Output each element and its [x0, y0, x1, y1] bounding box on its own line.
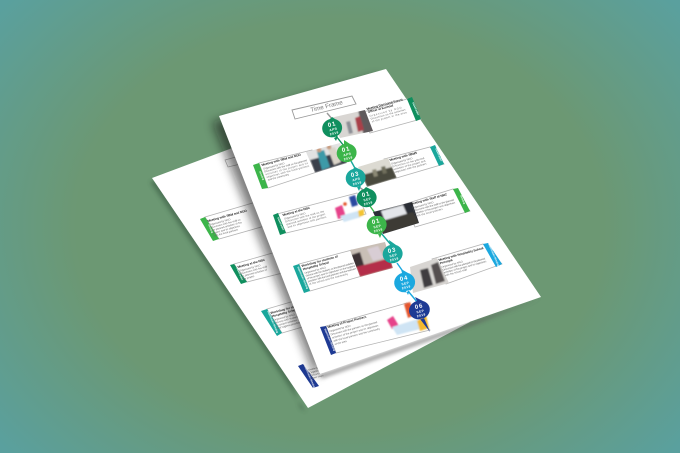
row 1 text: Officer at Kurnool [367, 103, 394, 114]
row 6 text: Session with the students on the planned activities [305, 261, 355, 278]
row 5 photo [373, 202, 419, 234]
row 6 text: Organized by NGO [304, 265, 326, 275]
row 3 date badge: 2019 [352, 180, 362, 186]
row 3 text [389, 149, 428, 174]
row 8 text: Discussion with the partners on the planned [330, 320, 378, 336]
row 1 box [360, 99, 421, 133]
back row: green [200, 202, 262, 241]
row 8: left, navy: Stakeholder Meeting [323, 328, 336, 352]
row 3: right, teal [346, 145, 444, 192]
row 6 tab [293, 264, 310, 293]
back row: teal: Session with students [274, 314, 300, 325]
row 3 date badge: APR [352, 176, 361, 182]
back row: green: project and its objectives [212, 224, 241, 235]
back row: dark green: on planned activities of [241, 268, 268, 278]
row 1 photo [330, 110, 373, 138]
row 6: left, teal: Stakeholder Meeting [296, 266, 309, 290]
row 6 date badge: SEP [389, 252, 398, 258]
row 4: left, dark green: Stakeholder [276, 217, 285, 231]
row 7 date badge: 2019 [401, 284, 411, 290]
row 7 tab [483, 243, 502, 267]
row 8 date badge: 06 [414, 303, 424, 311]
row 7 date badge [394, 269, 415, 295]
row 8 text: activities of the project and its objectives [331, 323, 380, 340]
row 8 text [327, 313, 382, 346]
back row: green: Meeting with SBM and NGO [207, 209, 248, 223]
row 3 text: Organized by NGO [390, 156, 413, 166]
row 4 text: and its objectives with partners [287, 215, 328, 229]
back row: teal: Organized by NGO [273, 312, 295, 322]
row 4 text [282, 203, 328, 229]
row 4 text: planned activities of the project [286, 212, 326, 226]
row 5 tab [453, 188, 470, 213]
row 5 date badge: SEP [373, 223, 382, 229]
row 7 box [432, 244, 502, 284]
row 2 date badge: APR [343, 151, 352, 157]
back row: teal: Workshop for students of [270, 301, 308, 315]
row 3 photo [358, 158, 397, 187]
row 3 text: objectives with the partners [394, 161, 428, 174]
back row: teal: on project activities [275, 318, 298, 327]
row 2 tab [253, 163, 268, 189]
row 7 text: with the school staff [444, 268, 468, 277]
row 6 text: Workshop for students of [301, 254, 339, 268]
row 4 text: Meeting at the NRC [282, 206, 311, 217]
row 8 text: of the area [334, 339, 348, 346]
row 1 tab [407, 97, 421, 121]
row 5: right, green [367, 188, 470, 240]
row 2 box [259, 150, 320, 188]
row 1 date badge [322, 117, 342, 141]
back row: teal [261, 302, 302, 336]
row 5 date badge: 2019 [373, 227, 383, 233]
row 4 date badge: 01 [361, 191, 371, 199]
row 3 tab [430, 145, 444, 166]
front page sheet [219, 69, 541, 374]
row 7 text: Principal [439, 258, 453, 265]
row 8 text: Meeting of Project Partners [327, 315, 367, 329]
row 6 text: Hospitality School [302, 260, 330, 271]
row 4 tab [273, 213, 286, 235]
row 5 text [410, 191, 458, 218]
row 3 text: Meeting with SBMS [389, 151, 418, 162]
back page content [200, 157, 324, 388]
front page shadow [212, 76, 400, 378]
row 4 date badge: 2019 [363, 200, 373, 206]
row 8 date badge: SEP [416, 308, 425, 314]
row 2 date badge [337, 140, 357, 162]
back row: teal: Hospitality School [271, 307, 299, 318]
row 1: right, dark green: Stakeholder [411, 102, 420, 116]
row 8 date badge [409, 297, 430, 332]
back row: dark green: Meeting at the NRC [237, 258, 266, 269]
row 5 text: Organized by NGO [411, 200, 434, 210]
row 8 text: with the local partners and the community [333, 326, 381, 343]
row 4 date badge: SEP [363, 196, 372, 202]
row 5 text: activities of the project and objectives [414, 200, 456, 215]
back title box [224, 157, 238, 168]
row 4: left, dark green [273, 187, 377, 235]
row 5 text: Discussion with the staff on the planned [413, 198, 455, 212]
row 8 text: Organized by NGO [329, 324, 351, 333]
back row: dark green: the project [242, 274, 255, 281]
row 7 text: Meeting with Hospitality School [438, 246, 484, 262]
back row: teal: and hygiene practices [276, 320, 303, 330]
back page shadow [150, 154, 306, 412]
back row: dark green: Discussion with the staff [240, 264, 268, 275]
back page sheet [152, 147, 470, 408]
row 4 box [277, 193, 366, 233]
back row: green: Meeting [207, 224, 214, 234]
row 8: left, navy [320, 297, 430, 355]
row 5 box [405, 189, 470, 227]
back page [150, 147, 470, 412]
row 7 text [438, 246, 491, 277]
row 8 illustration [387, 302, 429, 335]
row 7 photo [410, 258, 449, 293]
back row: navy: Organized by NGO [309, 365, 331, 375]
row 4 text: Discussion with the staff on the [285, 209, 325, 223]
row 6 date badge: 2019 [389, 256, 399, 262]
row 6 date badge: 03 [387, 247, 397, 255]
back row: dark green: Organized by NGO [238, 263, 261, 273]
row 2 text: Discussion with the staff on the planned [264, 158, 308, 173]
row 7 text: Discussion with the principal on the planned [442, 256, 486, 272]
row 2: left, green: Meeting [258, 171, 265, 181]
row 1 text [366, 98, 409, 123]
row 1 date badge: 2019 [329, 130, 339, 136]
row 5: right, green: Meeting [459, 195, 466, 205]
back row: green: Organized by NGO [208, 217, 231, 227]
timeline connector [327, 113, 418, 303]
row 6: left, teal [293, 237, 403, 293]
back row: navy [298, 364, 324, 388]
back row: green: Discussion with the staff on [210, 217, 242, 229]
back row: dark green [230, 252, 281, 284]
row 1 date badge: 01 [327, 121, 337, 129]
row 6 box [299, 250, 362, 291]
back row: teal: Stakeholder Meeting [266, 310, 279, 334]
front page bottom edge shadow [320, 298, 541, 378]
row 6 photo [350, 242, 393, 277]
row 1: right, dark green [322, 97, 421, 142]
back row: navy: Meeting of Partners [308, 362, 332, 372]
row 2 text: objectives with the local partners [266, 164, 310, 179]
row 2 photo [306, 143, 347, 173]
back row: navy: Stakeholder Meeting [303, 365, 316, 389]
row 7 date badge: SEP [401, 280, 410, 286]
row 2 text [261, 152, 312, 182]
row 7 text: activities of the project and its objectives [443, 259, 488, 274]
row 3 date badge: 03 [350, 171, 360, 179]
row 1 text: Meeting Divisional Forest [366, 98, 403, 111]
row 6 date badge [383, 240, 403, 263]
row 4 illustration [335, 195, 364, 222]
row 6 text [301, 251, 359, 286]
back row: green: the planned activities of the [211, 220, 243, 232]
row 3 box [384, 147, 444, 179]
row 2 date badge: 01 [341, 146, 351, 154]
back row: navy: Next steps [311, 373, 325, 380]
row 5 date badge [367, 216, 387, 238]
row 8 tab [320, 326, 336, 355]
row 1 date badge: APR [329, 126, 338, 132]
front page [219, 69, 541, 374]
row 2 text: and the community [267, 172, 290, 182]
row 4 date badge [357, 187, 377, 207]
row 2 text: Organized by NGO [262, 161, 285, 171]
row 1 text: Organized by NGO [369, 106, 402, 118]
row 3 text: Discussion on the planned [392, 156, 425, 168]
row 1 text: of the project in the area [371, 110, 408, 123]
row 1 text: Discussion on the activities [370, 107, 407, 121]
back row: navy: Discussion [310, 370, 324, 377]
row 2 text: activities of the project and its [265, 161, 309, 176]
row 2: left, green [253, 138, 357, 189]
row 6 text: of the project and its objectives on the hygiene [306, 264, 356, 280]
back row: dark green: Stakeholder [235, 267, 244, 281]
row 3 text: activities of the project and [393, 159, 427, 171]
row 3: right, teal: Stakeholder [434, 148, 443, 162]
title box: Time Frame [292, 96, 356, 119]
back row: green: with the local partners [213, 227, 239, 238]
row 5 date badge: 01 [371, 218, 381, 226]
row 4 text: Organized by NGO [283, 211, 306, 221]
row 3 date badge [346, 167, 366, 191]
row 8 date badge: 2019 [416, 312, 426, 318]
row 2 date badge: 2019 [343, 155, 353, 161]
title box: Time Frame: Time Frame [310, 99, 344, 114]
row 6 text: practices with the local partners and the teachers [307, 266, 358, 283]
row 7: right, blue [394, 243, 502, 298]
row 6 text: of the school and the community [308, 272, 349, 286]
row 8 box [326, 303, 430, 353]
row 7 text: Organized by NGO [441, 259, 463, 269]
row 5 text: Meeting with Staff of NRC [410, 192, 448, 206]
row 5 text: with the local partners [415, 207, 444, 218]
row 7: right, blue: Stakeholder Meeting [487, 243, 500, 267]
row 7 date badge: 04 [399, 275, 409, 283]
row 2 text: Meeting with SBM and NGO [261, 153, 302, 167]
